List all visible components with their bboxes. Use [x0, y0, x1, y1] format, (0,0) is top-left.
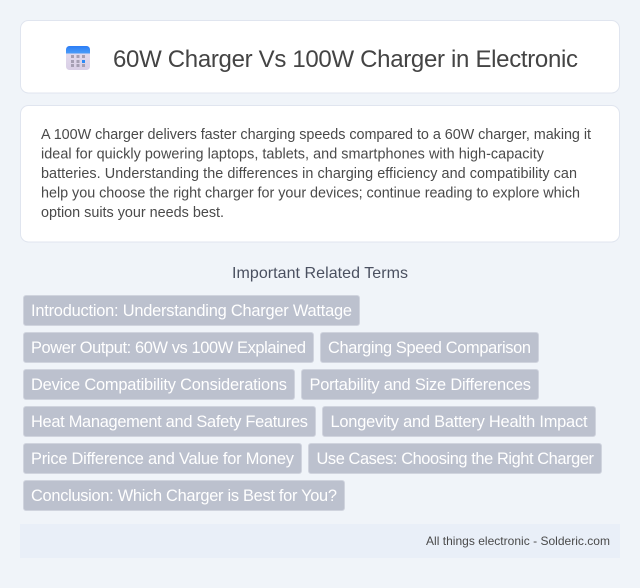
panel: related term tags [24, 296, 602, 510]
tag: longevity [322, 406, 596, 436]
tag: price difference [24, 444, 302, 474]
title: 60W Charger Vs 100W Charger in Electronic [113, 46, 578, 73]
tag: power output [24, 332, 314, 362]
tag: introduction: Introduction: Understanding Charger Wattage [31, 302, 352, 320]
intro paragraph: help you choose the right charger for your devices; continue reading to explore which [41, 186, 580, 202]
tag: power output: Power Output: 60W vs 100W Explained [31, 339, 306, 357]
tag: heat management [24, 406, 316, 436]
footer credit: All things electronic - Solderic.com [426, 534, 610, 548]
tag: introduction [24, 296, 360, 326]
tag: conclusion [24, 480, 344, 510]
tag: charging speed: Charging Speed Comparison [328, 339, 531, 357]
tag: portability [302, 370, 538, 400]
icon: calendar grid [66, 46, 90, 70]
tag: conclusion: Conclusion: Which Charger is Best for You? [31, 487, 337, 505]
panel: title card [20, 20, 620, 93]
tag: heat management: Heat Management and Safety Features [31, 413, 308, 431]
heading: important related terms: Important Related Terms [232, 265, 408, 282]
tag: device compatibility [24, 370, 294, 400]
tag: charging speed [320, 332, 538, 362]
intro paragraph: A 100W charger delivers faster charging speeds compared to a 60W charger, making it [41, 127, 591, 143]
tag: use cases [308, 444, 602, 474]
tag: price difference: Price Difference and Value for Money [31, 450, 295, 468]
footer bar [20, 524, 620, 558]
intro paragraph: option suits your needs best. [41, 205, 224, 221]
intro paragraph: batteries. Understanding the differences in charging efficiency and compatibility can [41, 166, 577, 182]
tag: portability: Portability and Size Differences [310, 376, 531, 394]
tag: longevity: Longevity and Battery Health Impact [330, 413, 588, 431]
tag: use cases: Use Cases: Choosing the Right Charger [316, 450, 595, 468]
tag: device compatibility: Device Compatibility Considerations [31, 376, 287, 394]
panel: intro text card [20, 106, 620, 242]
intro paragraph: ideal for quickly powering laptops, tablets, and smartphones with high-capacity [41, 146, 545, 162]
